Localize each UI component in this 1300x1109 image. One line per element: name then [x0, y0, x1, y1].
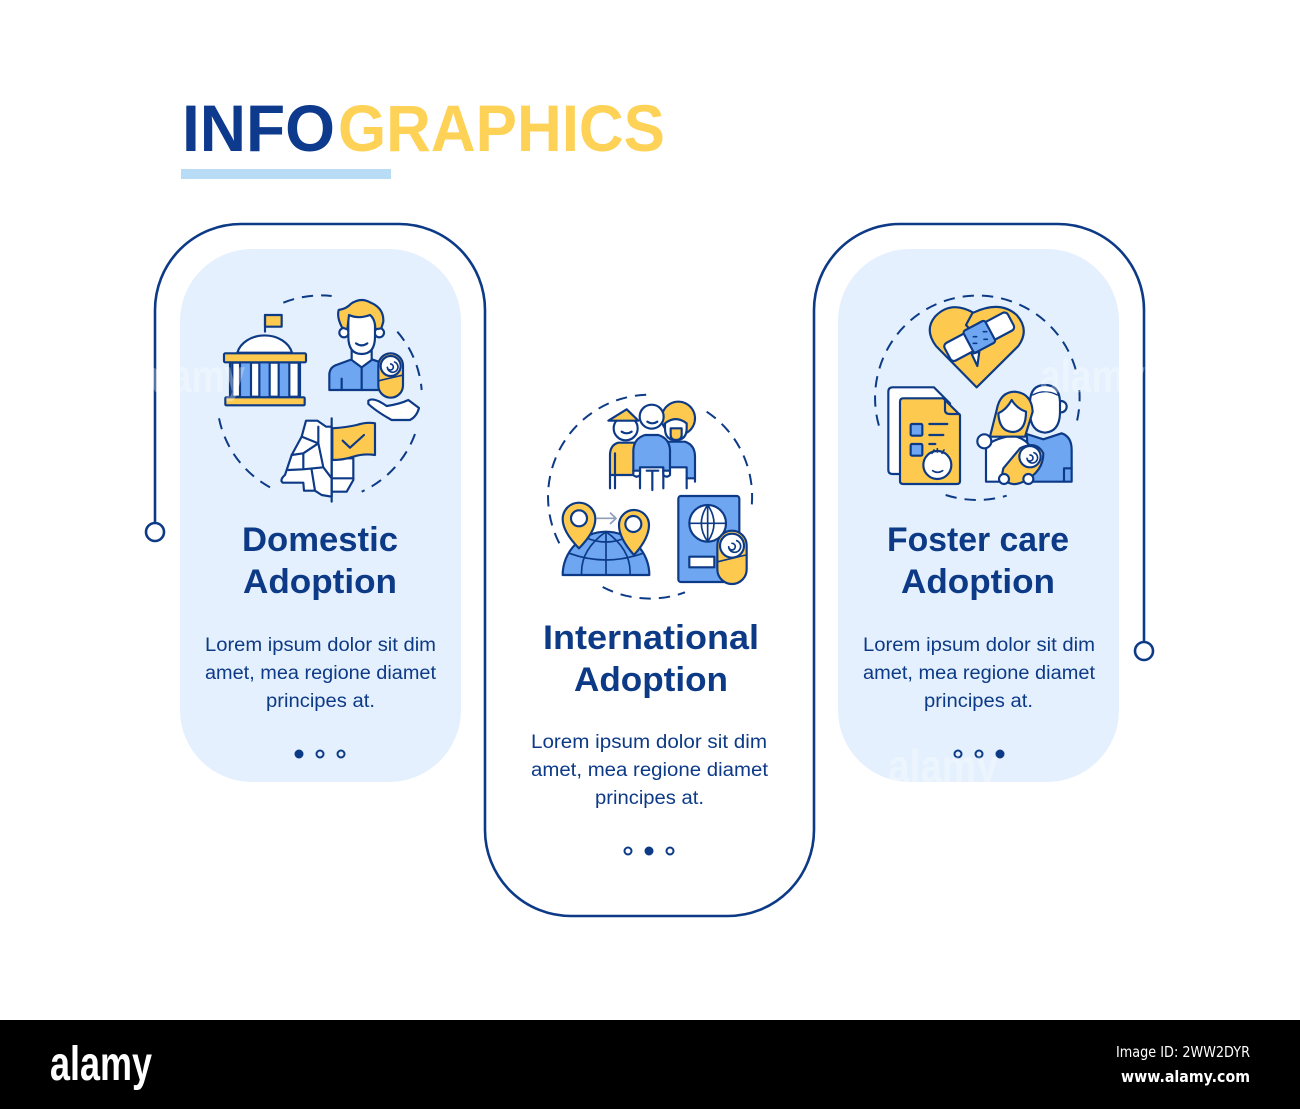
- icon: domestic adoption: [219, 295, 422, 502]
- pagination dots: foster care: [954, 750, 1004, 758]
- text: foster care body: Lorem ipsum dolor sit dim: [863, 635, 1095, 656]
- text: international body: principes at.: [595, 788, 704, 809]
- heading: foster care: Foster care: [887, 521, 1069, 559]
- heading: domestic: Adoption: [243, 563, 397, 601]
- icon: foster care adoption: [875, 296, 1080, 500]
- footer url: www.alamy.com: [1121, 1067, 1250, 1086]
- title: INFO: [182, 91, 335, 165]
- text: international body: [531, 732, 769, 809]
- watermark text: alamy: [888, 740, 998, 792]
- panel: foster care background: [838, 249, 1119, 782]
- dashed ring: [548, 395, 752, 599]
- heading: domestic: Domestic: [242, 521, 398, 559]
- connecting outline: [146, 224, 1153, 916]
- mended heart: [930, 307, 1024, 387]
- heading: international: International: [543, 619, 759, 657]
- dashed ring: [875, 296, 1080, 500]
- state map with flag: [281, 418, 375, 502]
- footer image id: Image ID: 2WW2DYR: [1116, 1043, 1250, 1061]
- panel: domestic background: [180, 249, 461, 782]
- text: domestic body: Lorem ipsum dolor sit dim: [205, 635, 436, 656]
- group of people: [608, 402, 695, 490]
- pagination dots: international: [624, 848, 674, 854]
- title: GRAPHICS: [338, 91, 665, 165]
- text: international body: Lorem ipsum dolor sit dim: [531, 732, 767, 753]
- text: foster care body: amet, mea regione diamet: [863, 663, 1096, 684]
- adoption documents: [888, 387, 960, 484]
- heading: international: [543, 619, 759, 699]
- title: [182, 91, 665, 165]
- heading: domestic: [242, 521, 398, 601]
- pagination dots: domestic: [296, 750, 344, 758]
- footer bar: [0, 1020, 1300, 1109]
- heading: foster care: Adoption: [901, 563, 1055, 601]
- watermark text: alamy: [1040, 350, 1145, 402]
- text: domestic body: [205, 635, 437, 712]
- watermark text: alamy: [140, 350, 245, 402]
- footer logo: alamy: [50, 1038, 152, 1091]
- man holding baby: [329, 300, 419, 420]
- passport with baby: [678, 496, 747, 584]
- arrow between pins: [597, 513, 616, 524]
- text: domestic body: principes at.: [266, 691, 375, 712]
- family with baby: [977, 385, 1072, 484]
- globe with location pins: [563, 503, 649, 575]
- heading: international: Adoption: [574, 661, 728, 699]
- icon: international adoption: [548, 395, 752, 599]
- text: foster care body: [863, 635, 1096, 712]
- text: domestic body: amet, mea regione diamet: [205, 663, 437, 684]
- dashed ring: [219, 295, 422, 492]
- text: foster care body: principes at.: [924, 691, 1033, 712]
- heading: foster care: [887, 521, 1069, 601]
- title underline: [181, 169, 391, 179]
- capitol building: [224, 315, 306, 405]
- text: international body: amet, mea regione diamet: [531, 760, 769, 781]
- watermark text: [140, 350, 1145, 792]
